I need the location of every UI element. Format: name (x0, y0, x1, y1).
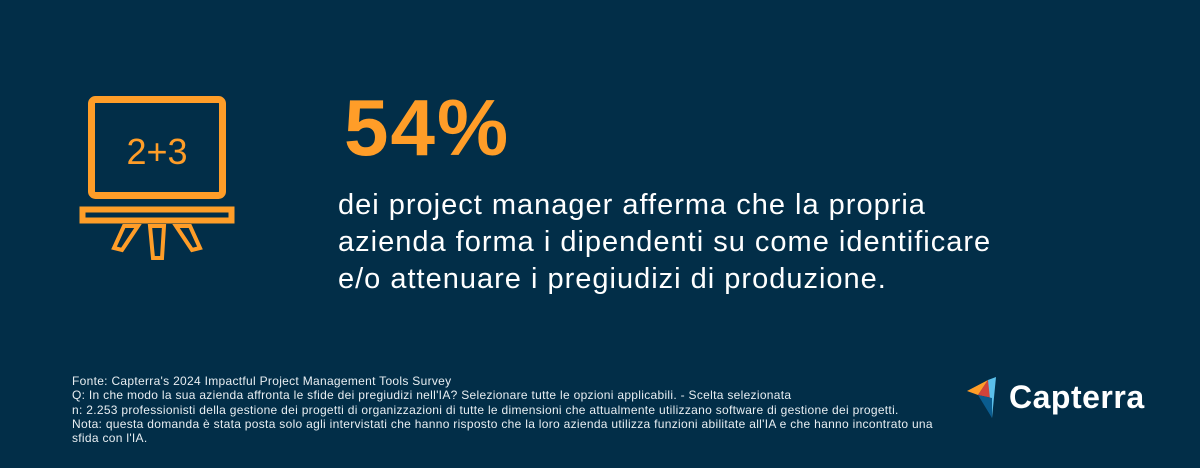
heading: 54%: 54% (344, 83, 510, 172)
text block: footnote: sfida con l'IA. (72, 431, 148, 445)
logo: Capterra: Capterra (1009, 379, 1145, 415)
text block: footnote: n: 2.253 professionisti della gestione dei progetti di organizzazioni di tutte le dimensioni che attualmente utilizzano software di gestione dei progetti. (72, 403, 899, 417)
text block: footnote: Q: In che modo la sua azienda affronta le sfide dei pregiudizi nell'IA? Selezionare tutte le opzioni applicabili. - Scelta selezionata (72, 388, 791, 402)
logo: Capterra (967, 377, 1145, 418)
text block: description: dei project manager afferma che la propria (338, 189, 926, 221)
icon: chalkboard: 2+3 (126, 131, 188, 172)
icon: chalkboard (80, 96, 234, 260)
text block: description: azienda forma i dipendenti su come identificare (338, 226, 991, 258)
text block: footnote (72, 374, 933, 445)
text block: footnote: Fonte: Capterra's 2024 Impactful Project Management Tools Survey (72, 374, 451, 388)
text block: footnote: Nota: questa domanda è stata posta solo agli intervistati che hanno risposto che la loro azienda utilizza funzioni abilitate all'IA e che hanno incontrato una (72, 417, 933, 431)
text block: description (338, 189, 991, 295)
text block: description: e/o attenuare i pregiudizi di produzione. (338, 263, 887, 295)
